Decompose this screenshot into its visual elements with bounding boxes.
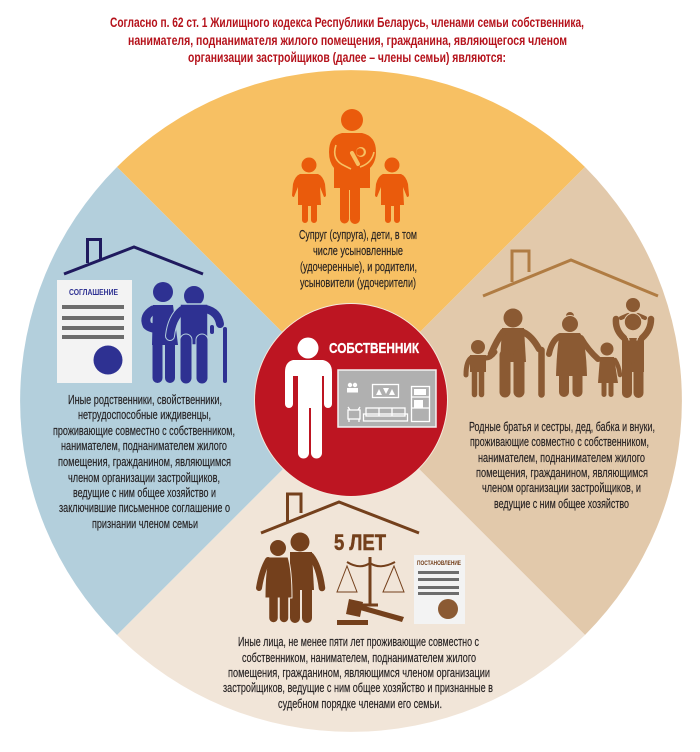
icon: gavel (337, 599, 404, 625)
icon: room interior with sofa (338, 370, 436, 427)
icon: court ruling document (414, 555, 465, 624)
text block: other relatives and dependants: ведущие с ним общее хозяйство и (73, 486, 216, 500)
text block: brothers, sisters, grandparents: членом организации застройщиков, и (482, 481, 641, 495)
icon: scales of justice (337, 557, 404, 605)
text block: other relatives and dependants: нетрудоспособные иждивенцы, (78, 408, 211, 422)
icon: court ruling document: ПОСТАНОВЛЕНИЕ (417, 561, 461, 567)
icon: elderly couple (259, 532, 322, 618)
text block: brothers, sisters, grandparents: нанимателем, поднанимателем жилого (478, 451, 645, 465)
text block: brothers, sisters, grandparents (469, 420, 655, 511)
text block: other relatives and dependants (53, 393, 235, 531)
panel: brothers, sisters, grandparents (351, 167, 682, 635)
text block: other relatives and dependants: заключившие письменное соглашение о (59, 501, 230, 515)
icon: agreement document (57, 280, 132, 383)
text block: other relatives and dependants: Иные родственники, свойственники, (68, 393, 222, 407)
text block: other relatives and dependants: признании членом семьи (92, 517, 198, 531)
text block: spouse, children, parents: числе усыновленные (313, 244, 403, 258)
icon: owner figure (285, 338, 332, 459)
panel: spouse, children, parents (117, 70, 585, 401)
icon: extended family group (466, 298, 651, 394)
title: нанимателя, поднанимателя жилого помещения, гражданина, являющегося членом (128, 32, 567, 48)
text block: spouse, children, parents: Супруг (супруга), дети, в том (299, 228, 417, 242)
text block: persons living together five years (223, 635, 493, 711)
text block: persons living together five years: Иные лица, не менее пяти лет проживающие совместно с (238, 635, 479, 649)
icon: mother with baby and two children (292, 109, 409, 224)
panel: owner centre circle (254, 303, 448, 497)
icon: house roof, blue (64, 240, 203, 274)
text block: brothers, sisters, grandparents: ведущие с ним общее хозяйство (494, 497, 629, 511)
text block: persons living together five years: застройщиков, ведущие с ним общее хозяйство и признанные в (223, 681, 493, 695)
text block: other relatives and dependants: помещения, гражданином, являющимся (58, 455, 231, 469)
text block: other relatives and dependants: членом организации застройщиков, (68, 471, 220, 485)
text block: spouse, children, parents (299, 228, 417, 290)
icon: agreement document: СОГЛАШЕНИЕ (69, 287, 118, 297)
panel: other relatives and dependants (20, 167, 351, 635)
text block: other relatives and dependants: нанимателем, поднанимателем жилого (61, 439, 227, 453)
text block: spouse, children, parents: усыновители (удочерители) (300, 276, 416, 290)
label: five years: 5 ЛЕТ (334, 530, 386, 555)
icon: house roof, brown (261, 494, 419, 533)
icon: house roof, tan (483, 251, 658, 296)
text block: persons living together five years: помещения, гражданином, являющимся членом организации (228, 666, 490, 680)
heading: owner: СОБСТВЕННИК (329, 340, 420, 357)
text block: spouse, children, parents: (удочеренные), и родители, (300, 260, 417, 274)
title: организации застройщиков (далее – члены семьи) являются: (188, 49, 506, 65)
icon: two people with a cane (146, 282, 225, 381)
panel: persons living together five years (117, 401, 585, 732)
text block: persons living together five years: судебном порядке членами его семьи. (278, 697, 442, 711)
text block: persons living together five years: собственником, нанимателем, поднанимателем жилого (242, 651, 476, 665)
title (110, 14, 584, 65)
text block: other relatives and dependants: проживающие совместно с собственником, (53, 424, 235, 438)
